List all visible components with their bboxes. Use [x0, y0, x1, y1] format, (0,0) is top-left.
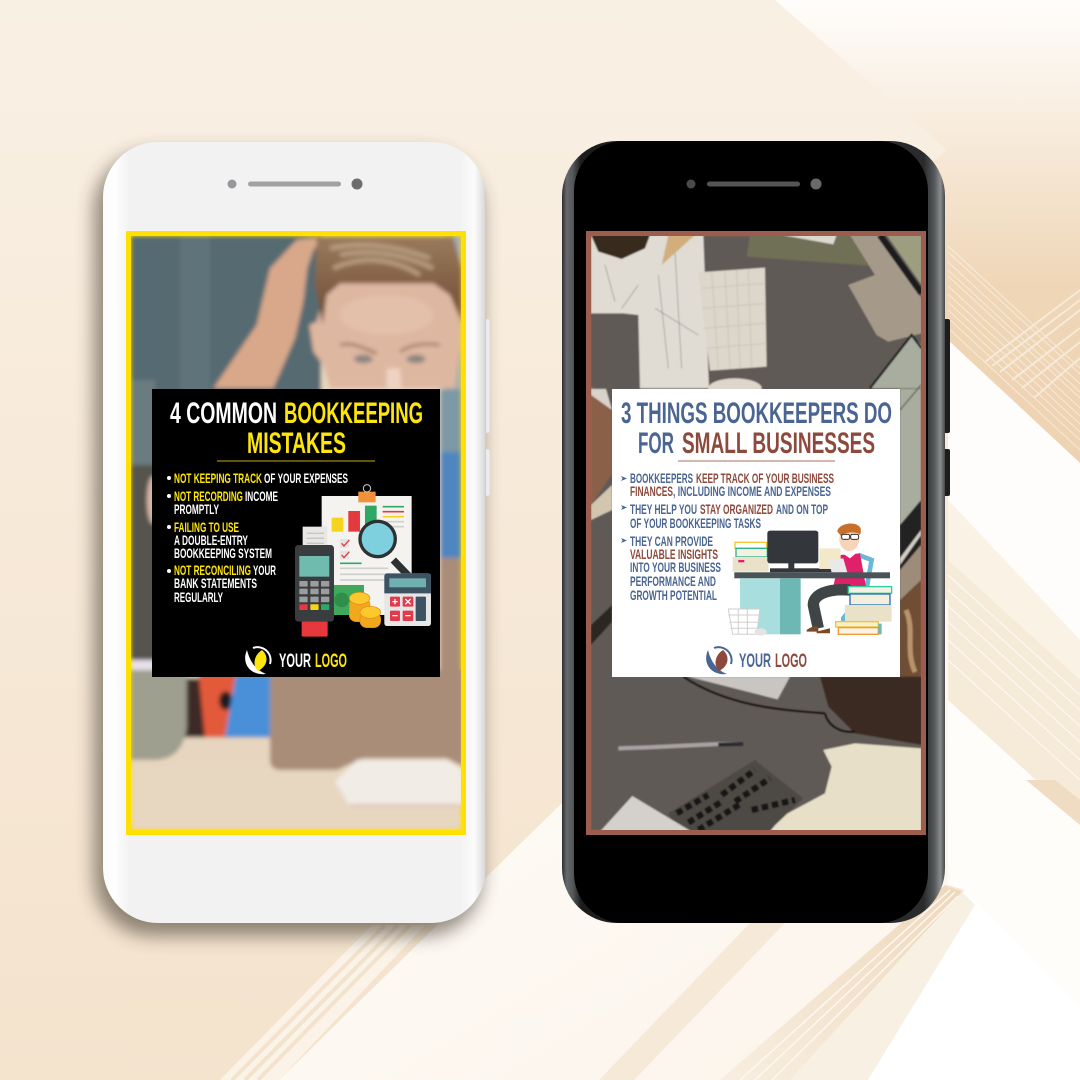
person torso [833, 553, 866, 587]
green mat [747, 235, 870, 266]
cash [333, 585, 364, 615]
receipt [303, 527, 327, 557]
mistakes list: BANK STATEMENTS [174, 575, 257, 591]
title: MISTAKES [247, 427, 346, 460]
legs [813, 590, 850, 628]
logo [245, 647, 347, 674]
shirt [591, 235, 709, 388]
tasks list: FINANCES [630, 483, 673, 499]
tasks list: AND ON TOP [776, 501, 828, 517]
monitor screen [887, 235, 922, 285]
head [839, 527, 859, 551]
card [302, 615, 328, 637]
tasks list: INTO YOUR BUSINESS [630, 559, 721, 575]
paper held [819, 548, 841, 569]
mistakes list: OF YOUR EXPENSES [264, 470, 348, 486]
mistakes list: REGULARLY [174, 589, 223, 605]
mistakes list: A DOUBLE-ENTRY [174, 532, 248, 548]
calculator keypad [668, 760, 803, 832]
phone body [562, 141, 945, 923]
mistakes list: FAILING TO USE [174, 519, 239, 535]
phone: black [562, 141, 950, 923]
arm and hand [213, 237, 327, 388]
left strip [591, 385, 612, 505]
hair and headset [820, 677, 922, 745]
mistakes list: BOOKKEEPING SYSTEM [174, 545, 272, 561]
phone: white [94, 142, 490, 936]
mistakes list: INCOME [245, 488, 278, 504]
logo: LOGO [775, 651, 807, 672]
binder clip [358, 492, 376, 502]
illustration: bookkeeper at desk [728, 523, 892, 636]
tasks list: STAY ORGANIZED [700, 501, 773, 517]
keyboard [698, 268, 767, 371]
mistakes list [167, 470, 348, 605]
book stack right [848, 587, 892, 593]
earpiece and camera [686, 178, 822, 190]
title [170, 397, 423, 460]
tasks list: THEY HELP YOU [630, 501, 697, 517]
paper [688, 677, 790, 699]
white keyboard [335, 760, 463, 807]
head [591, 235, 650, 259]
screen frame [586, 231, 926, 835]
monitor stand [848, 235, 922, 342]
logo [706, 647, 807, 674]
hair [315, 237, 462, 325]
screen frame [126, 231, 466, 835]
right strip [900, 388, 921, 470]
tasks list: KEEP TRACK OF YOUR BUSINESS [696, 470, 834, 486]
logo: YOUR [279, 651, 311, 672]
tasks list: OF YOUR BOOKKEEPING TASKS [630, 515, 761, 531]
book stack left [735, 542, 767, 548]
logo: YOUR [739, 651, 771, 672]
tasks list: PERFORMANCE AND [630, 573, 716, 589]
title [621, 397, 892, 460]
illustration: finance documents, terminal and calculator [295, 485, 431, 637]
mistakes list: NOT RECORDING [174, 488, 243, 504]
chair [843, 555, 872, 622]
mouse [708, 377, 763, 389]
report sheet [322, 496, 412, 615]
tasks list: VALUABLE INSIGHTS [630, 546, 718, 562]
cup [131, 670, 187, 760]
title: SMALL BUSINESSES [682, 427, 875, 460]
monitor [788, 552, 794, 569]
title: 4 COMMON [170, 397, 277, 430]
tasks list: GROWTH POTENTIAL [630, 587, 717, 603]
face [309, 282, 462, 388]
phone body [103, 142, 486, 923]
tasks list [621, 470, 834, 603]
side buttons [943, 319, 950, 496]
panel: 3 things bookkeepers do [612, 389, 900, 677]
tablet [870, 335, 922, 388]
desk [734, 572, 890, 578]
laptop [270, 670, 463, 770]
panel: 4 common bookkeeping mistakes [152, 389, 440, 677]
photo: stressed man at laptop [131, 236, 463, 830]
photo: overhead office desk [591, 235, 922, 832]
tasks list: THEY CAN PROVIDE [630, 533, 713, 549]
mistakes list: NOT KEEPING TRACK [174, 470, 262, 486]
mistakes list: PROMPTLY [174, 501, 219, 517]
background objects [182, 677, 208, 740]
earpiece and camera [228, 178, 362, 190]
phone shadow [94, 152, 482, 936]
title: FOR [638, 427, 674, 460]
title: 3 THINGS BOOKKEEPERS DO [621, 397, 892, 430]
mistakes list: YOUR [253, 562, 276, 578]
calculator [384, 573, 431, 626]
side buttons [485, 319, 490, 496]
paper corner [600, 796, 692, 832]
magnifier [393, 560, 409, 577]
logo: LOGO [315, 651, 347, 672]
pen [618, 744, 743, 748]
terminal [295, 545, 334, 622]
coins [349, 592, 381, 628]
title: BOOKKEEPING [284, 397, 423, 430]
tasks list: BOOKKEEPERS [630, 470, 693, 486]
tasks list: , INCLUDING INCOME AND EXPENSES [673, 483, 831, 499]
mistakes list: NOT RECONCILING [174, 562, 251, 578]
hoodie [770, 743, 922, 832]
wastebasket [728, 609, 760, 634]
